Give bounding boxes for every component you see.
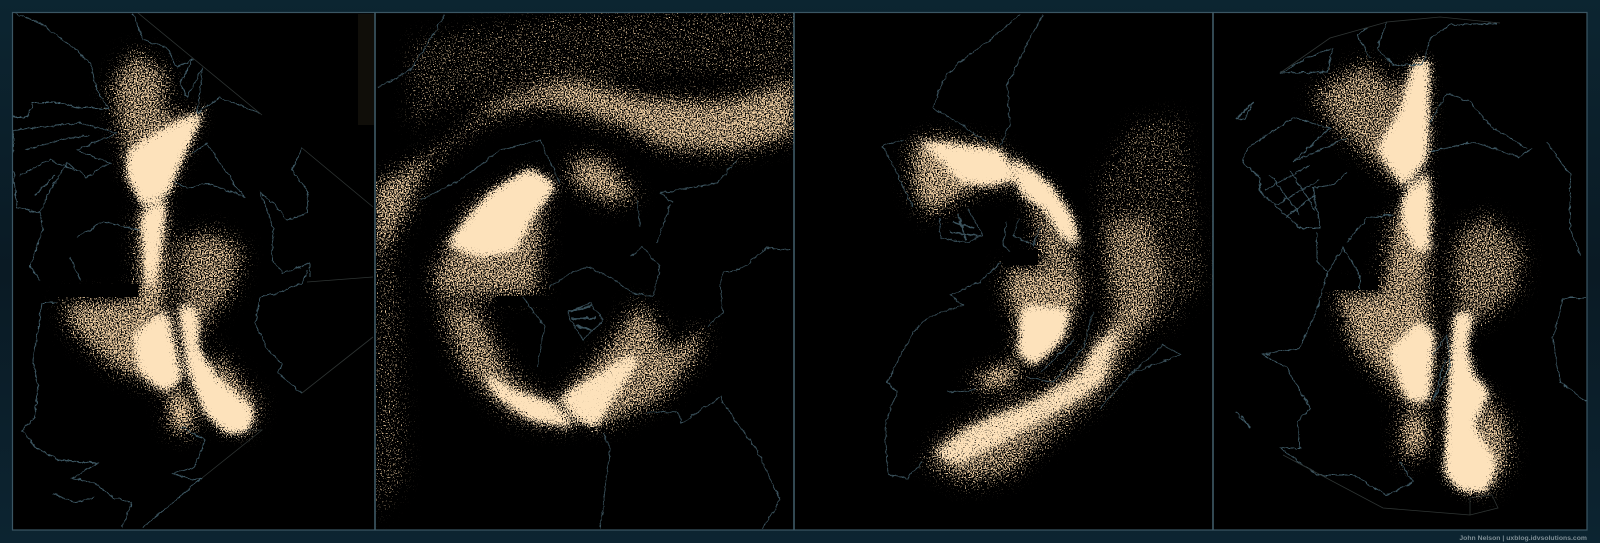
panel 1 map boundary lines — [138, 13, 373, 478]
panel 1 diffuse flight-path density — [60, 48, 262, 435]
panel 3: crescent projection — [883, 15, 1205, 486]
panel 3 quadrant mask — [1003, 250, 1038, 265]
panel 2 quadrant mask — [497, 296, 548, 306]
panel 2 diffuse flight-path density — [370, 10, 798, 520]
panel 4 coastlines — [1236, 22, 1586, 495]
panel 2 bright core — [445, 168, 640, 430]
panel 1 coastlines — [13, 13, 310, 528]
panel 3 coastlines — [883, 15, 1180, 478]
panel 1 bright core — [126, 108, 254, 434]
panel 4 quadrant mask — [1320, 275, 1378, 290]
panel 4 bright core — [1376, 60, 1497, 492]
panel 3 diffuse flight-path density — [908, 115, 1205, 486]
panel 4 map boundary — [1280, 17, 1500, 515]
panel 1: polar map with vertical flight stream — [13, 13, 373, 528]
credit line: John Nelson | uxblog.idvsolutions.com — [1459, 535, 1587, 542]
panel 4: elongated polar projection — [1236, 17, 1586, 515]
panel 2: circular ring projection — [370, 10, 798, 530]
panel 1 cut mask — [50, 284, 138, 297]
panel 3 bright core — [912, 140, 1124, 466]
panel 4 diffuse flight-path density — [1310, 58, 1524, 496]
panel 2 coastlines — [378, 14, 790, 530]
